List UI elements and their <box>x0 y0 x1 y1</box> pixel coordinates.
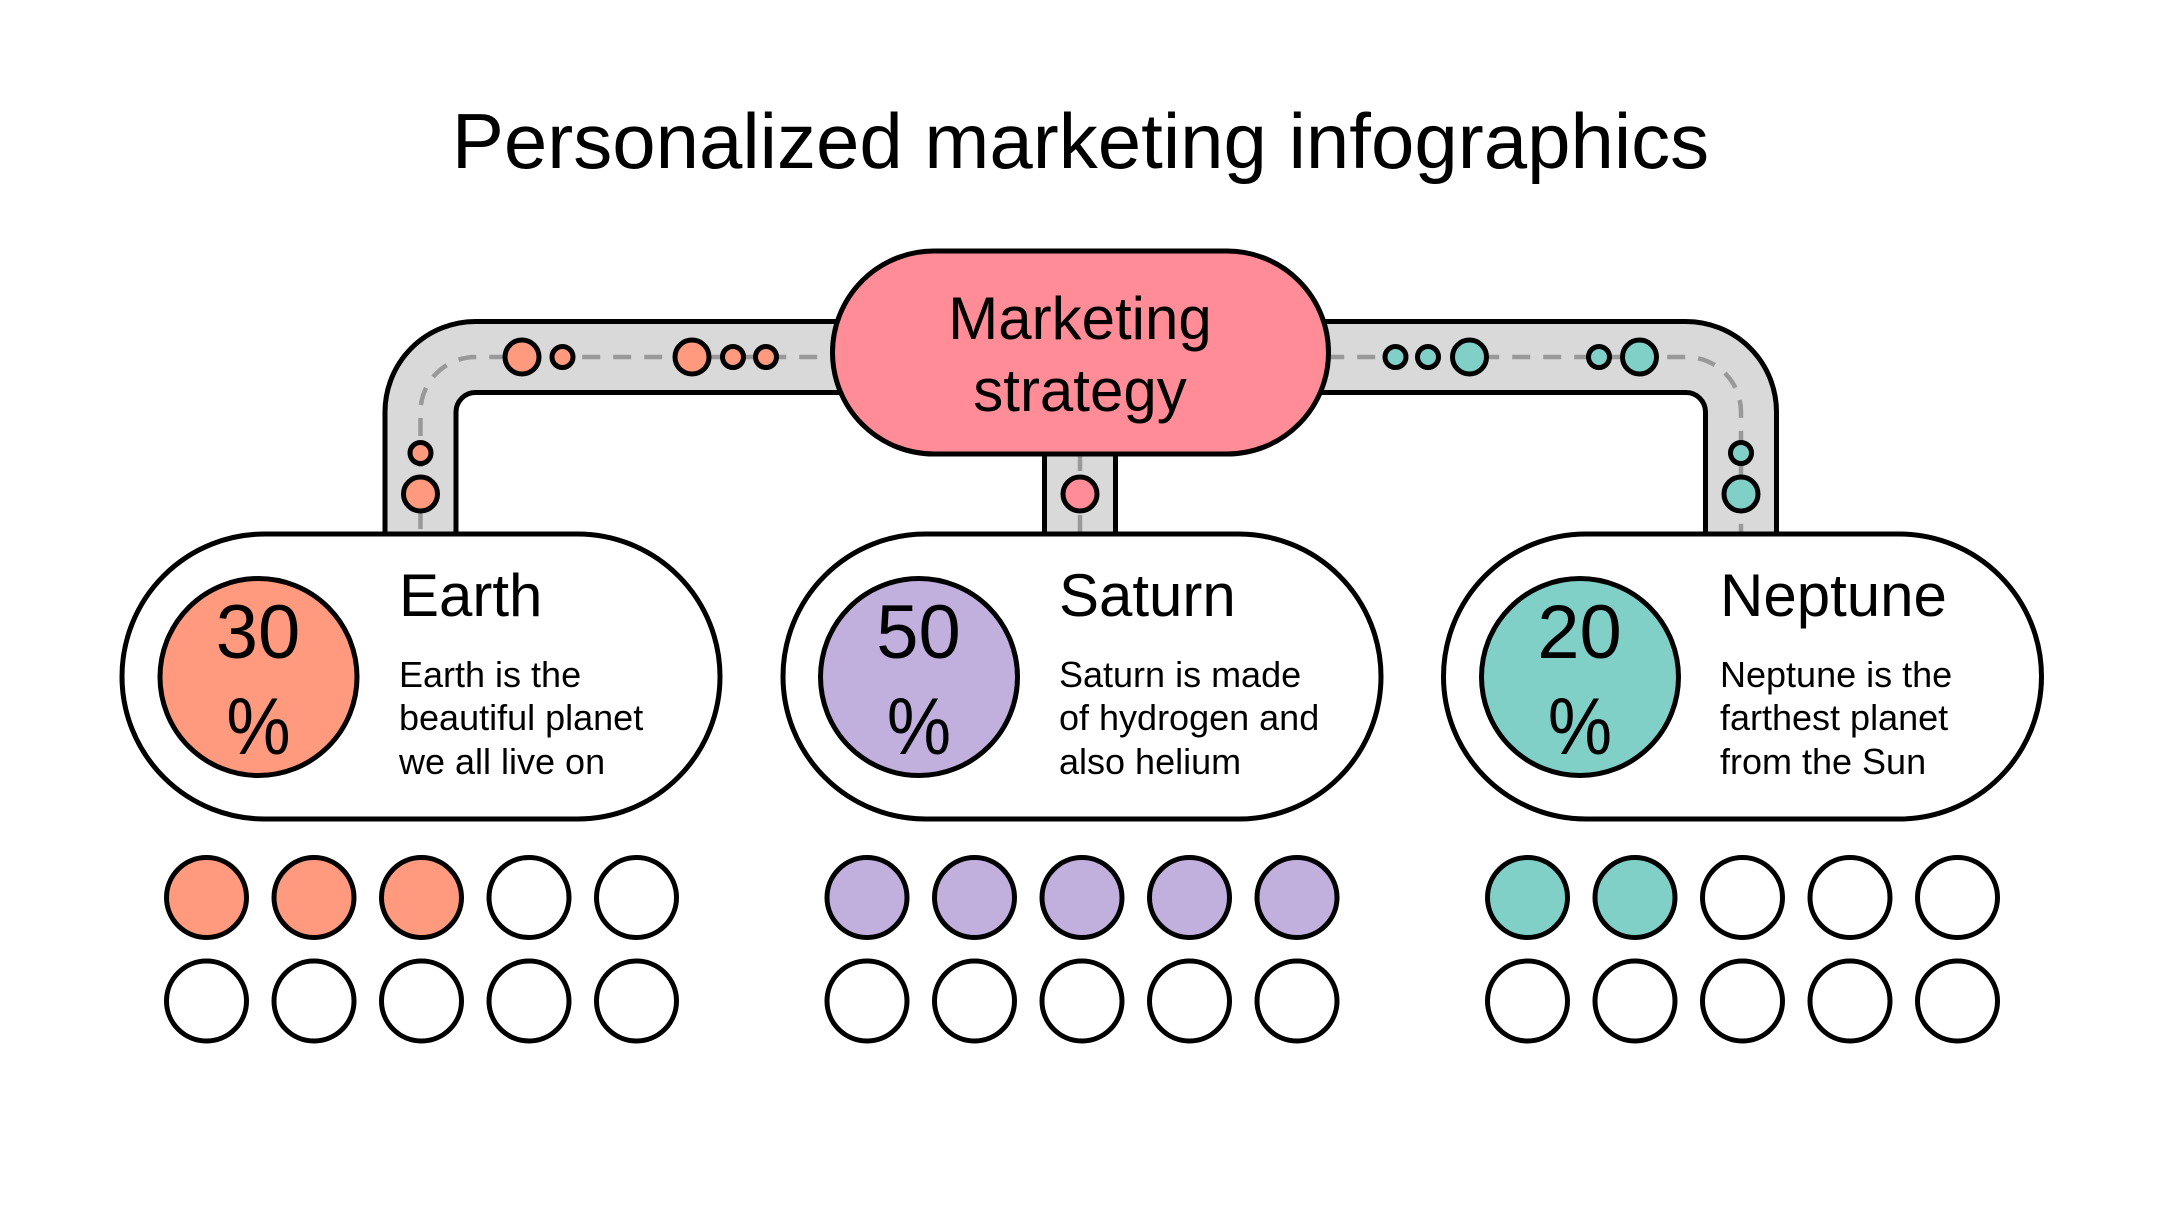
moving dot: Saturn route <box>1063 477 1097 511</box>
Earth heading: Earth <box>399 562 542 629</box>
Saturn percentage circle: % <box>887 682 951 772</box>
panel: Neptune <box>1444 534 2042 819</box>
moving dots: Neptune route <box>1385 340 1758 511</box>
Neptune description: Neptune is the <box>1720 654 1952 695</box>
Saturn description: Saturn is made <box>1059 654 1301 695</box>
panel: Earth <box>122 534 720 819</box>
Earth percentage circle: % <box>226 682 291 772</box>
Saturn percentage circle: 50 <box>876 590 961 675</box>
Neptune description: farthest planet <box>1720 697 1948 738</box>
Earth description: Earth is the <box>399 654 581 695</box>
Earth percentage circle: 30 <box>216 590 300 675</box>
Saturn heading: Saturn <box>1059 562 1236 629</box>
token grid: Neptune 2 of 10 <box>1488 858 1998 1041</box>
Neptune percentage circle: 20 <box>1537 590 1622 675</box>
central pill: Marketing strategy: strategy <box>973 357 1187 424</box>
Saturn description: also helium <box>1059 741 1241 782</box>
Neptune heading: Neptune <box>1720 562 1947 629</box>
Neptune percentage circle <box>1482 578 1678 776</box>
title: Personalized marketing infographics <box>452 97 1709 185</box>
Earth percentage circle <box>160 578 357 776</box>
Saturn description: of hydrogen and <box>1059 697 1319 738</box>
moving dots: Earth route <box>404 340 776 511</box>
Earth description: beautiful planet <box>399 697 643 738</box>
connector roads <box>420 357 1741 560</box>
central pill: Marketing strategy: Marketing <box>948 285 1212 352</box>
Neptune percentage circle: % <box>1548 682 1612 772</box>
Neptune description: from the Sun <box>1720 741 1926 782</box>
panel: Saturn <box>783 534 1381 819</box>
token grid: Saturn 5 of 10 <box>827 858 1337 1041</box>
token grid: Earth 3 of 10 <box>166 858 676 1041</box>
central pill: Marketing strategy <box>832 251 1328 454</box>
Earth description: we all live on <box>398 741 605 782</box>
Saturn percentage circle <box>820 578 1018 776</box>
